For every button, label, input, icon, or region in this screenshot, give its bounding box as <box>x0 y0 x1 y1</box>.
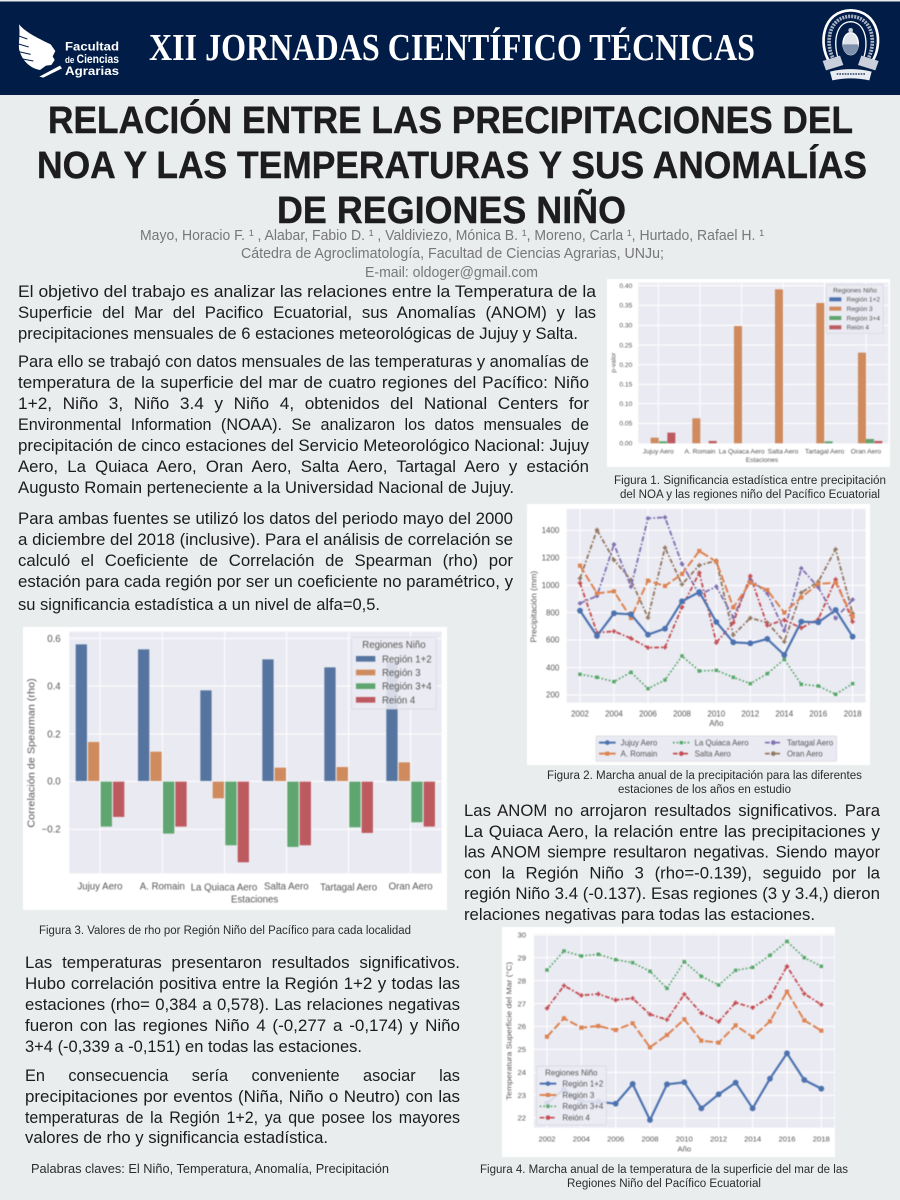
chart: figure 1 p-value bars: Regiones Niño <box>833 287 877 294</box>
text block: method: Para ambas fuentes se utilizó los datos del periodo mayo del 2000 <box>18 510 513 528</box>
text block: temperature result: estaciones (rho= 0,384 a 0,578). Las relaciones negativas <box>25 996 460 1014</box>
chart: figure 3 Spearman rho bars: Regiones Niño <box>362 640 426 651</box>
chart: figure 4 sea surface temperature lines: 2010 <box>676 1134 693 1143</box>
text block: anomalies result: La Quiaca Aero, la relación entre las precipitaciones y <box>464 823 881 841</box>
caption: figure 4: Regiones Niño del Pacífico Ecuatorial <box>567 1178 761 1190</box>
main title <box>37 98 867 232</box>
text block: method: su significancia estadística a un nivel de alfa=0,5. <box>18 596 380 614</box>
chart: figure 4 sea surface temperature lines: 26 <box>517 1022 526 1031</box>
chart: figure 3 Spearman rho bars: Región 1+2 <box>382 654 432 665</box>
chart: figure 1 p-value bars: Reión 4 <box>847 324 869 331</box>
chart: figure 1 p-value bars: 0.05 <box>619 421 633 428</box>
caption: figure 2 <box>547 770 862 796</box>
text block: anomalies result: con la Región Niño 3 (rho=-0.139), seguido por la <box>464 864 881 882</box>
chart: figure 1 p-value bars: 0.35 <box>619 303 633 310</box>
chart: figure 4 sea surface temperature lines: 22 <box>517 1114 526 1123</box>
event title: XII JORNADAS CIENTÍFICO TÉCNICAS <box>149 27 755 69</box>
chart: figure 4 sea surface temperature lines: Año <box>678 1145 691 1154</box>
chart: figure 2 annual precipitation lines: 2014 <box>775 709 794 718</box>
text block: temperature result <box>25 954 460 1056</box>
text block: objective: El objetivo del trabajo es analizar las relaciones entre la Temperatura de la <box>18 283 597 301</box>
text block: objective: precipitaciones mensuales de 6 estaciones meteorológicas de Jujuy y Salta. <box>18 325 578 343</box>
chart: figure 4 sea surface temperature lines: 27 <box>517 999 526 1008</box>
text block: objective: Superficie del Mar del Pacifico Ecuatorial, sus Anomalías (ANOM) y las <box>18 304 596 322</box>
caption: figure 2: estaciones de los años en estudio <box>618 784 791 796</box>
chart: figure 2 annual precipitation lines: 800 <box>546 608 560 617</box>
faculty name: Agrarias <box>65 64 119 78</box>
caption: figure 3: Figura 3. Valores de rho por Región Niño del Pacífico para cada localidad <box>39 925 411 937</box>
chart: figure 2 annual precipitation lines: 2010 <box>707 709 726 718</box>
text block: conclusion <box>25 1067 460 1147</box>
chart: figure 1 p-value bars: Región 3 <box>847 306 873 313</box>
chart: figure 2 annual precipitation lines: 2016 <box>809 709 828 718</box>
main title: RELACIÓN ENTRE LAS PRECIPITACIONES DEL <box>48 98 853 142</box>
chart: figure 4 sea surface temperature lines: 2014 <box>744 1134 762 1143</box>
text block: data <box>18 353 590 497</box>
chart: figure 1 p-value bars: Tartagal Aero <box>805 449 845 456</box>
chart: figure 4 sea surface temperature lines <box>502 927 835 1157</box>
header banner <box>0 2 900 95</box>
keywords: Palabras claves: El Niño, Temperatura, Anomalía, Precipitación <box>31 1162 389 1176</box>
chart: figure 3 Spearman rho bars: Región 3 <box>382 668 421 679</box>
chart: figure 1 p-value bars: Región 1+2 <box>847 297 880 304</box>
chart: figure 4 sea surface temperature lines: Reión 4 <box>562 1113 590 1122</box>
authors and affiliation: Cátedra de Agroclimatología, Facultad de Ciencias Agrarias, UNJu; <box>241 245 664 262</box>
text block: conclusion: valores de rho y significancia estadística. <box>25 1129 328 1147</box>
chart: figure 2 annual precipitation lines: Oran Aero <box>787 749 823 758</box>
chart: figure 3 Spearman rho bars: 0.6 <box>47 634 61 645</box>
chart: figure 1 p-value bars: 0.20 <box>619 362 633 369</box>
caption: figure 1 <box>614 475 886 501</box>
faculty name: Facultad <box>65 40 119 54</box>
chart: figure 3 Spearman rho bars: Jujuy Aero <box>77 882 123 893</box>
chart: figure 2 annual precipitation lines: La Quiaca Aero <box>695 739 749 748</box>
chart: figure 2 annual precipitation lines <box>527 504 870 765</box>
chart: figure 4 sea surface temperature lines: 24 <box>517 1068 527 1077</box>
chart: figure 2 annual precipitation lines: Salta Aero <box>695 749 731 758</box>
chart: figure 4 sea surface temperature lines: 29 <box>517 953 526 962</box>
chart: figure 2 annual precipitation lines: 400 <box>546 663 560 672</box>
chart: figure 4 sea surface temperature lines: 2004 <box>573 1134 591 1143</box>
text block: conclusion: precipitaciones por eventos (Niña, Niño o Neutro) con las <box>25 1088 460 1106</box>
text block: data: Aero, La Quiaca Aero, Oran Aero, Salta Aero, Tartagal Aero y estación <box>18 458 589 476</box>
chart: figure 2 annual precipitation lines: 2012 <box>741 709 760 718</box>
chart: figure 1 p-value bars: Oran Aero <box>851 448 881 455</box>
chart: figure 3 Spearman rho bars: La Quiaca Aero <box>191 882 257 893</box>
main title: DE REGIONES NIÑO <box>277 188 626 232</box>
chart: figure 2 annual precipitation lines: 2006 <box>639 709 657 718</box>
text block: data: Environmental Information (NOAA). Se analizaron los datos mensuales de <box>18 416 589 434</box>
chart: figure 1 p-value bars: Estaciones <box>746 457 779 464</box>
text block: method: a diciembre del 2018 (inclusive). Para el análisis de correlación se <box>18 531 513 549</box>
chart: figure 1 p-value bars: 0.10 <box>619 401 633 408</box>
text block: temperature result: 3+4 (-0,339 a -0,151) en todas las estaciones. <box>25 1038 362 1056</box>
caption: figure 1: Figura 1. Significancia estadística entre precipitación <box>614 475 886 487</box>
chart: figure 4 sea surface temperature lines: 2012 <box>710 1134 727 1143</box>
authors and affiliation: E-mail: oldoger@gmail.com <box>365 264 538 281</box>
text block: method <box>18 510 514 614</box>
chart: figure 2 annual precipitation lines: 2018 <box>844 709 862 718</box>
chart: figure 1 p-value bars: Jujuy Aero <box>643 448 674 455</box>
text block: anomalies result: relaciones negativas para todas las estaciones. <box>464 906 815 924</box>
caption: figure 4 <box>480 1164 848 1190</box>
chart: figure 2 annual precipitation lines: 600 <box>546 636 560 645</box>
chart: figure 2 annual precipitation lines: 2004 <box>605 709 623 718</box>
icon: university crest <box>823 10 879 80</box>
authors and affiliation: Mayo, Horacio F. ¹ , Alabar, Fabio D. ¹ , Valdiviezo, Mónica B. ¹, Moreno, Carla ¹, Hurtado, Rafael H. ¹ <box>140 227 764 244</box>
chart: figure 4 sea surface temperature lines: Temperatura Superficie del Mar (°C) <box>504 961 513 1100</box>
chart: figure 2 annual precipitation lines: Tartagal Aero <box>787 739 834 748</box>
chart: figure 4 sea surface temperature lines: Regiones Niño <box>545 1069 598 1078</box>
chart: figure 3 Spearman rho bars: 0.2 <box>47 729 61 740</box>
chart: figure 3 Spearman rho bars: Estaciones <box>231 895 278 906</box>
chart: figure 4 sea surface temperature lines: 2016 <box>778 1134 795 1143</box>
chart: figure 1 p-value bars: 0.30 <box>619 323 633 330</box>
text block: temperature result: fueron con las regiones Niño 4 (-0,277 a -0,174) y Niño <box>25 1017 460 1035</box>
chart: figure 2 annual precipitation lines: 1400 <box>542 526 560 535</box>
chart: figure 1 p-value bars: 0.25 <box>619 342 633 349</box>
chart: figure 3 Spearman rho bars: A. Romain <box>140 882 185 893</box>
chart: figure 4 sea surface temperature lines: 2008 <box>641 1134 659 1143</box>
text block: conclusion: En consecuencia sería conveniente asociar las <box>25 1067 460 1085</box>
text block: objective <box>18 283 597 343</box>
text block: method: estación para cada región por ser un coeficiente no paramétrico, y <box>18 573 514 591</box>
chart: figure 3 Spearman rho bars: Salta Aero <box>264 882 309 893</box>
chart: figure 3 Spearman rho bars <box>23 627 447 910</box>
text block: data: Augusto Romain perteneciente a la Universidad Nacional de Jujuy. <box>18 479 514 497</box>
chart: figure 3 Spearman rho bars: Reión 4 <box>382 695 416 706</box>
chart: figure 1 p-value bars: 0.15 <box>619 382 633 389</box>
chart: figure 2 annual precipitation lines: A. Romain <box>621 749 657 758</box>
icon: faculty wing logo <box>17 24 62 78</box>
chart: figure 1 p-value bars: Salta Aero <box>768 448 799 455</box>
chart: figure 4 sea surface temperature lines: 30 <box>517 931 526 940</box>
chart: figure 1 p-value bars: La Quiaca Aero <box>719 449 765 456</box>
chart: figure 3 Spearman rho bars: Correlación de Spearman (rho) <box>27 678 38 828</box>
chart: figure 3 Spearman rho bars: −0.2 <box>42 825 61 836</box>
text block: anomalies result: las ANOM siempre resultaron negativas. Siendo mayor <box>464 844 881 862</box>
chart: figure 3 Spearman rho bars: Región 3+4 <box>382 682 432 693</box>
text block: anomalies result: Las ANOM no arrojaron resultados significativos. Para <box>464 802 881 820</box>
chart: figure 4 sea surface temperature lines: Región 3 <box>562 1091 595 1100</box>
chart: figure 4 sea surface temperature lines: 2018 <box>813 1134 830 1143</box>
chart: figure 1 p-value bars: 0.40 <box>619 283 633 290</box>
chart: figure 2 annual precipitation lines: 1000 <box>542 581 560 590</box>
chart: figure 1 p-value bars: A. Romain <box>684 448 716 455</box>
faculty name <box>65 40 119 78</box>
chart: figure 1 p-value bars: p-valor <box>611 352 618 373</box>
text block: method: calculó el Coeficiente de Correlación de Spearman (rho) por <box>18 552 514 570</box>
chart: figure 2 annual precipitation lines: Jujuy Aero <box>621 739 658 748</box>
chart: figure 3 Spearman rho bars: 0.0 <box>47 777 61 788</box>
chart: figure 3 Spearman rho bars: 0.4 <box>47 681 61 692</box>
chart: figure 4 sea surface temperature lines: 2006 <box>607 1134 624 1143</box>
chart: figure 4 sea surface temperature lines: 28 <box>517 976 526 985</box>
text block: data: precipitación de cinco estaciones del Servicio Meteorológico Nacional: Jujuy <box>18 437 590 455</box>
text block: data: 1+2, Niño 3, Niño 3.4 y Niño 4, obtenidos del National Centers for <box>18 395 590 413</box>
chart: figure 2 annual precipitation lines: 200 <box>546 691 560 700</box>
text block: temperature result: Hubo correlación positiva entre la Región 1+2 y todas las <box>25 975 460 993</box>
chart: figure 2 annual precipitation lines: Precipitación (mm) <box>529 570 538 642</box>
text block: conclusion: temperaturas de la Región 1+2, ya que posee los mayores <box>25 1109 460 1127</box>
chart: figure 2 annual precipitation lines: 2002 <box>571 709 589 718</box>
chart: figure 4 sea surface temperature lines: 23 <box>517 1091 526 1100</box>
caption: figure 4: Figura 4. Marcha anual de la temperatura de la superficie del mar de las <box>480 1164 848 1176</box>
caption: figure 1: del NOA y las regiones niño del Pacífico Ecuatorial <box>620 489 880 501</box>
chart: figure 4 sea surface temperature lines: Región 1+2 <box>562 1080 604 1089</box>
chart: figure 2 annual precipitation lines: 2008 <box>673 709 691 718</box>
text block: data: temperatura de la superficie del mar de cuatro regiones del Pacífico: Niño <box>18 374 589 392</box>
text block: data: Para ello se trabajó con datos mensuales de las temperaturas y anomalías de <box>18 353 589 371</box>
text block: temperature result: Las temperaturas presentaron resultados significativos. <box>25 954 460 972</box>
chart: figure 3 Spearman rho bars: Oran Aero <box>389 882 433 893</box>
chart: figure 4 sea surface temperature lines: Región 3+4 <box>562 1102 604 1111</box>
chart: figure 1 p-value bars: Región 3+4 <box>847 315 880 322</box>
authors and affiliation <box>140 227 764 281</box>
chart: figure 1 p-value bars <box>607 279 890 467</box>
chart: figure 4 sea surface temperature lines: 2002 <box>538 1134 556 1143</box>
faculty name: de Ciencias <box>65 54 119 66</box>
chart: figure 4 sea surface temperature lines: 25 <box>517 1045 526 1054</box>
chart: figure 2 annual precipitation lines: Año <box>709 719 724 728</box>
text block: anomalies result <box>464 802 881 924</box>
chart: figure 1 p-value bars: 0.00 <box>619 440 633 447</box>
caption: figure 2: Figura 2. Marcha anual de la precipitación para las diferentes <box>547 770 862 782</box>
chart: figure 2 annual precipitation lines: 1200 <box>542 553 560 562</box>
chart: figure 3 Spearman rho bars: Tartagal Aero <box>320 882 377 893</box>
text block: anomalies result: región Niño 3.4 (-0.137). Esas regiones (3 y 3.4,) dieron <box>464 885 880 903</box>
